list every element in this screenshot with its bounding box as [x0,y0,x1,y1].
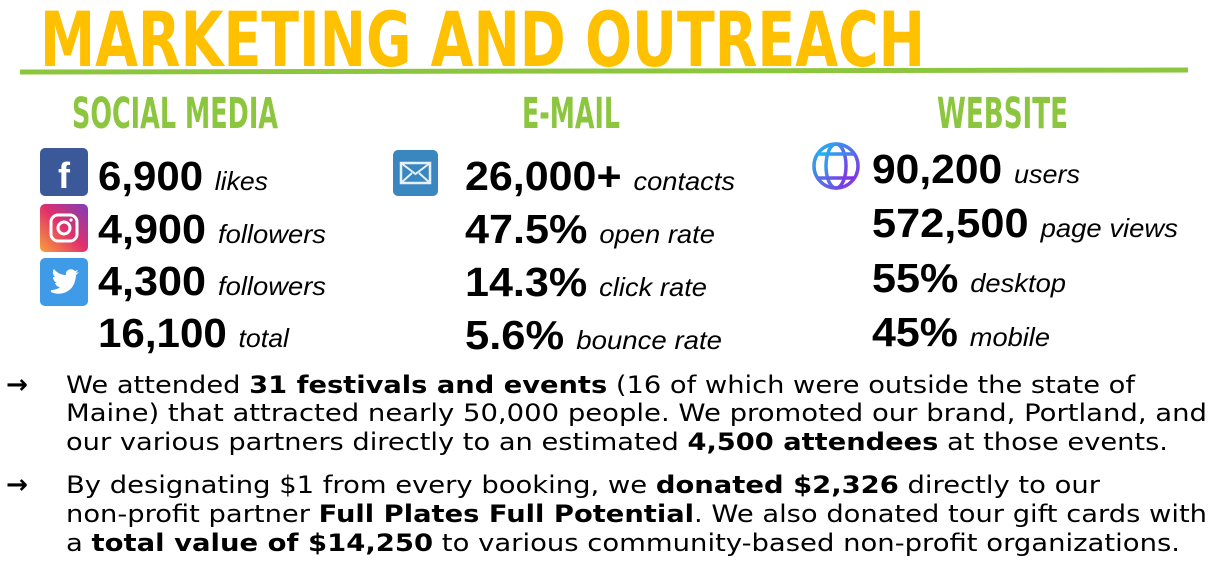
arrow: → [6,370,28,400]
bullet: donations: By designating $1 from every booking, we donated $2,326 directly to our [66,471,1100,499]
stat: page views: 572,500 page views [872,200,1178,246]
bullet: festivals: We attended 31 festivals and events (16 of which were outside the state of [66,371,1136,399]
stat: twitter followers: 4,300 followers [98,258,326,304]
stat: click rate: 14.3% click rate [465,259,707,305]
stat: bounce rate: 5.6% bounce rate [465,312,722,358]
bullet: festivals [6,370,1207,456]
stat: users: 90,200 users [872,146,1080,192]
icon: facebook [40,148,88,196]
heading: social media: SOCIAL MEDIA [72,89,278,139]
stat: desktop: 55% desktop [872,255,1066,301]
bullet: donations [6,470,1207,557]
stat: likes: 6,900 likes [98,153,268,199]
title underline [20,70,1188,72]
icon: facebook: f [58,155,71,196]
icon: instagram [40,204,88,252]
heading: website: WEBSITE [937,89,1068,139]
stat: total: 16,100 total [98,310,290,356]
icon: twitter [40,258,88,306]
bullet: donations: non-profit partner Full Plates Full Potential . We also donated tour gift cards with [66,500,1207,528]
panel: email [393,150,735,358]
stat: instagram followers: 4,900 followers [98,206,326,252]
stat: open rate: 47.5% open rate [465,206,715,252]
bullet: festivals: our various partners directly to an estimated 4,500 attendees at those events. [66,428,1168,456]
bullet: donations: a total value of $14,250 to various community-based non-profit organizations. [66,529,1180,557]
panel: website [814,144,1178,355]
icon: envelope [393,150,438,196]
icon: globe [814,144,858,188]
stat: contacts: 26,000+ contacts [465,153,735,199]
arrow: → [6,470,28,500]
bullet: festivals: Maine) that attracted nearly 50,000 people. We promoted our brand, Portland, and [66,399,1207,427]
panel: social media [40,148,326,356]
stat: mobile: 45% mobile [872,309,1050,355]
heading: email: E-MAIL [522,89,620,139]
